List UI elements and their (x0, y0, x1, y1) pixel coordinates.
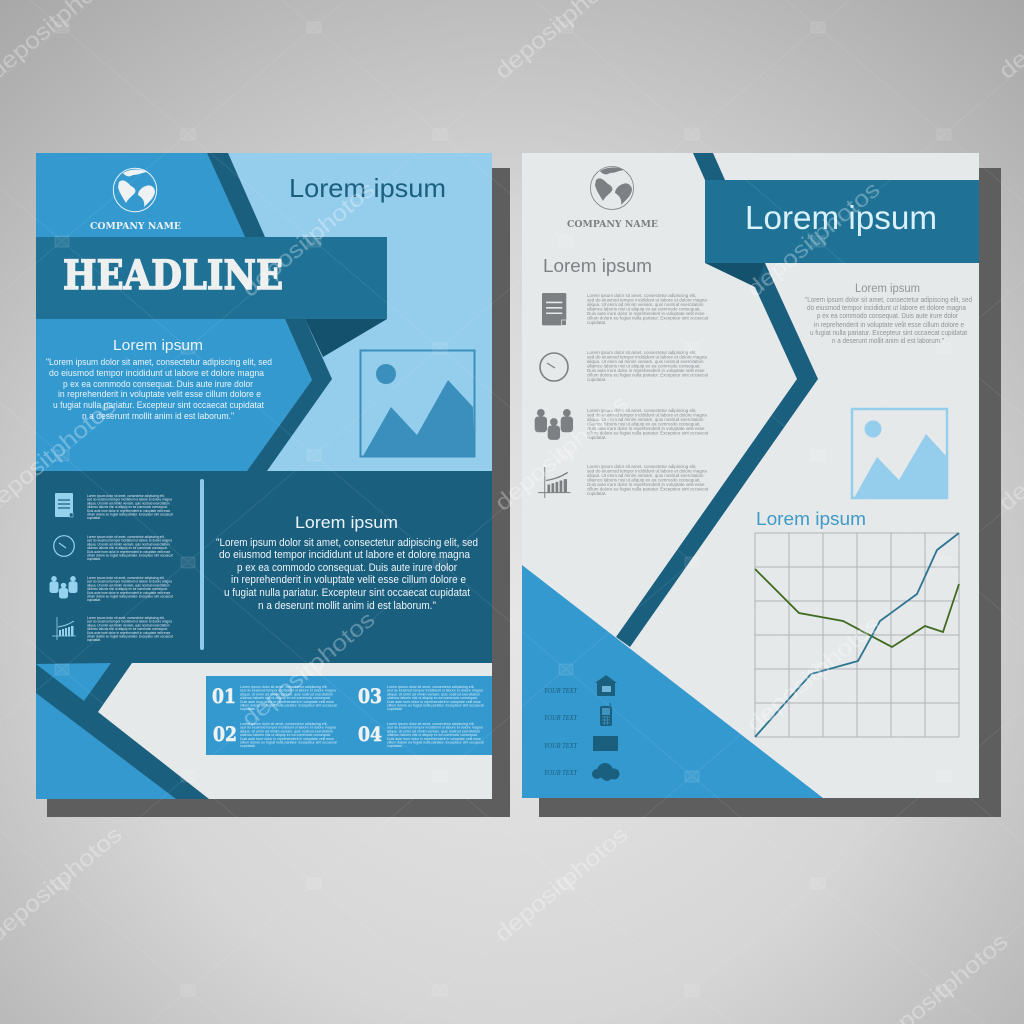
numbered item texts: cupidatat. (240, 707, 256, 711)
text blocks: right list: Duis aute irure dolor in reprehenderit in voluptate velit esse (587, 368, 705, 373)
numbered item texts: sed do eiusmod tempor incididunt ut labore et dolore magna (240, 726, 336, 730)
text block: top right paragraph (805, 283, 972, 345)
numbered item texts: cillum dolore eu fugiat nulla pariatur. Excepteur sint occaecat (240, 740, 337, 744)
watermark texts: depositphotos (490, 390, 633, 516)
icon: clock (540, 353, 568, 381)
text block: top right paragraph: Lorem ipsum (855, 283, 920, 295)
numbered item texts: ullamco laboris nisi ut aliquip ex ea commodo consequat. (387, 733, 478, 737)
text block: top right paragraph: "Lorem ipsum dolor sit amet, consectetur adipiscing elit, sed (805, 295, 972, 304)
text blocks: left list (87, 494, 173, 642)
number 03: 03 (358, 685, 382, 708)
text blocks: right list: cupidatat. (587, 491, 607, 496)
your text labels: YOUR TEXT (544, 769, 578, 777)
text block: dark panel: "Lorem ipsum dolor sit amet, consectetur adipiscing elit, sed (216, 537, 478, 549)
bottom dark stripes (36, 663, 209, 799)
text block: blue panel: u fugiat nulla pariatur. Excepteur sint occaecat cupidatat (53, 400, 264, 411)
lower blue arrow shape (36, 319, 312, 471)
left page shadow (47, 168, 510, 817)
text block: dark panel: u fugiat nulla pariatur. Excepteur sint occaecat cupidatat (224, 587, 470, 599)
numbered item texts: sed do eiusmod tempor incididunt ut labore et dolore magna (387, 689, 483, 693)
text block: blue panel: Lorem ipsum (113, 337, 203, 354)
text blocks: right list: Duis aute irure dolor in reprehenderit in voluptate velit esse (587, 311, 705, 316)
text blocks: right list: ullamco laboris nisi ut aliquip ex ea commodo consequat. (587, 478, 701, 482)
text blocks: left list: cillum dolore eu fugiat nulla pariatur. Excepteur sint occaecat (87, 554, 173, 558)
text blocks: right list: ullamco laboris nisi ut aliquip ex ea commodo consequat. (587, 422, 701, 426)
text blocks: left list: cillum dolore eu fugiat nulla pariatur. Excepteur sint occaecat (87, 594, 173, 598)
text blocks: left list: Lorem ipsum dolor sit amet, consectetur adipiscing elit, (87, 576, 165, 580)
text blocks: left list: cupidatat. (87, 598, 101, 602)
text blocks: left list: Duis aute irure dolor in reprehenderit in voluptate velit esse (87, 631, 171, 635)
numbered item texts: cillum dolore eu fugiat nulla pariatur. Excepteur sint occaecat (387, 740, 484, 744)
text block: blue panel: p ex ea commodo consequat. Duis aute irure dolor (63, 379, 253, 390)
numbered item texts (240, 685, 484, 748)
text blocks: right list: Lorem ipsum dolor sit amet, consectetur adipiscing elit, (587, 408, 697, 413)
number 01: 01 (212, 685, 236, 708)
text blocks: right list: Lorem ipsum dolor sit amet, consectetur adipiscing elit, (587, 293, 697, 298)
text blocks: right list: cillum dolore eu fugiat nulla pariatur. Excepteur sint occaecat (587, 372, 709, 378)
icon: people (535, 409, 573, 440)
text blocks: right list: ullamco laboris nisi ut aliquip ex ea commodo consequat. (587, 364, 701, 368)
text blocks: left list: Lorem ipsum dolor sit amet, consectetur adipiscing elit, (87, 535, 165, 539)
watermark texts: depositphotos (237, 176, 380, 302)
right page shadow (539, 168, 1001, 817)
icon: document (542, 293, 566, 325)
numbered item texts: Lorem ipsum dolor sit amet, consectetur adipiscing elit, (240, 685, 328, 689)
text blocks: left list: aliqua. Ut enim ad minim veniam, quis nostrud exercitation (87, 501, 170, 505)
text blocks: right list: Lorem ipsum dolor sit amet, consectetur adipiscing elit, (587, 350, 697, 355)
text block: top right paragraph: n a deserunt mollit anim id est laborum." (832, 336, 944, 345)
watermark texts: depositphotos (742, 611, 885, 737)
icon: image placeholder (852, 409, 947, 498)
numbered item texts: ullamco laboris nisi ut aliquip ex ea commodo consequat. (387, 696, 478, 700)
banner fold (705, 263, 765, 287)
large blue triangle (36, 693, 176, 799)
text blocks: right list: sed do eiusmod tempor incididunt ut labore et dolore magna (587, 298, 707, 302)
text blocks: left list: cupidatat. (87, 516, 101, 520)
text block: dark panel: in reprehenderit in voluptate velit esse cillum dolore e (231, 574, 466, 586)
bottom light area (36, 663, 492, 799)
text blocks: left list: aliqua. Ut enim ad minim veniam, quis nostrud exercitation (87, 583, 170, 587)
your text labels: YOUR TEXT (544, 742, 578, 750)
text blocks: right list: Duis aute irure dolor in reprehenderit in voluptate velit esse (587, 426, 705, 431)
numbered item texts: Duis aute irure dolor in reprehenderit in voluptate velit esse (387, 737, 481, 741)
text block: top right paragraph: do eiusmod tempor incididunt ut labore et dolore magna (807, 303, 966, 312)
vertical divider (200, 479, 204, 650)
icon: people (50, 576, 78, 598)
text blocks: left list: sed do eiusmod tempor incididunt ut labore et dolore magna (87, 498, 172, 502)
panel: numbered list (206, 676, 492, 755)
heading: Lorem ipsum (543, 255, 652, 276)
dark chevron stripe (247, 319, 332, 471)
text block: dark panel: Lorem ipsum (295, 513, 398, 532)
company name: COMPANY NAME (90, 221, 181, 232)
text blocks: right list: aliqua. Ut enim ad minim veniam, quis nostrud exercitation (587, 417, 704, 422)
numbered item texts: ullamco laboris nisi ut aliquip ex ea commodo consequat. (240, 696, 331, 700)
text blocks: right list: ullamco laboris nisi ut aliquip ex ea commodo consequat. (587, 306, 701, 312)
long chevron stripe (616, 263, 818, 647)
text blocks: right list (587, 293, 709, 496)
icon: clock (54, 536, 74, 556)
icon: image placeholder (360, 350, 474, 457)
text blocks: left list: cupidatat. (87, 557, 101, 561)
text blocks: left list: sed do eiusmod tempor incididunt ut labore et dolore magna (87, 620, 172, 624)
text blocks: left list: Lorem ipsum dolor sit amet, consectetur adipiscing elit, (87, 616, 165, 620)
banner title: Lorem ipsum (745, 199, 937, 236)
numbered item texts: aliqua. Ut enim ad minim veniam, quis nostrud exercitation (387, 692, 480, 696)
line chart (755, 533, 959, 737)
number 02: 02 (213, 723, 237, 746)
text blocks: left list: cillum dolore eu fugiat nulla pariatur. Excepteur sint occaecat (87, 512, 173, 516)
numbered item texts: sed do eiusmod tempor incididunt ut labore et dolore magna (387, 726, 483, 730)
numbered item texts: sed do eiusmod tempor incididunt ut labore et dolore magna (240, 689, 336, 693)
text block: blue panel: in reprehenderit in voluptate velit esse cillum dolore e (58, 389, 261, 400)
top dark stripe (693, 153, 725, 180)
text blocks: right list: sed do eiusmod tempor incididunt ut labore et dolore magna (587, 412, 707, 418)
text blocks: left list: Duis aute irure dolor in reprehenderit in voluptate velit esse (87, 550, 171, 554)
panel: right page (522, 153, 979, 798)
text block: blue panel: "Lorem ipsum dolor sit amet, consectetur adipiscing elit, sed (46, 357, 272, 368)
text blocks: right list: cillum dolore eu fugiat nulla pariatur. Excepteur sint occaecat (587, 316, 709, 320)
blue series (755, 533, 959, 737)
watermark texts: depositphotos (490, 821, 633, 947)
headline: HEADLINE (63, 252, 283, 299)
watermark texts: depositphotos (237, 606, 380, 732)
text blocks: right list: aliqua. Ut enim ad minim veniam, quis nostrud exercitation (587, 302, 704, 307)
text blocks: right list: cillum dolore eu fugiat nulla pariatur. Excepteur sint occaecat (587, 430, 709, 436)
heading: top right: Lorem ipsum (289, 173, 446, 203)
text block: dark panel (216, 513, 478, 612)
icon: house (595, 675, 617, 696)
text blocks: left list: Duis aute irure dolor in reprehenderit in voluptate velit esse (87, 509, 171, 513)
text block: top right paragraph: p ex ea commodo consequat. Duis aute irure dolor (817, 311, 959, 320)
text blocks: right list: aliqua. Ut enim ad minim veniam, quis nostrud exercitation (587, 359, 704, 364)
numbered item texts: Lorem ipsum dolor sit amet, consectetur adipiscing elit, (240, 722, 328, 726)
text blocks: left list: aliqua. Ut enim ad minim veniam, quis nostrud exercitation (87, 623, 170, 627)
numbered item texts: aliqua. Ut enim ad minim veniam, quis nostrud exercitation (240, 692, 333, 696)
text block: dark panel: p ex ea commodo consequat. Duis aute irure dolor (237, 562, 457, 574)
icon: rectangle (593, 736, 618, 751)
text blocks: left list: ullamco laboris nisi ut aliquip ex ea commodo consequat. (87, 505, 168, 509)
numbered item texts: Duis aute irure dolor in reprehenderit in voluptate velit esse (240, 700, 334, 704)
text block: dark panel: do eiusmod tempor incididunt ut labore et dolore magna (219, 549, 471, 561)
panel: left page (36, 153, 492, 799)
text blocks: left list: cillum dolore eu fugiat nulla pariatur. Excepteur sint occaecat (87, 634, 173, 638)
blue corner triangle (522, 565, 823, 798)
text blocks: left list: sed do eiusmod tempor incididunt ut labore et dolore magna (87, 580, 172, 584)
icon: globe (590, 166, 634, 210)
numbered item texts: aliqua. Ut enim ad minim veniam, quis nostrud exercitation (240, 729, 333, 733)
numbered item texts: aliqua. Ut enim ad minim veniam, quis nostrud exercitation (387, 729, 480, 733)
your text labels: YOUR TEXT (544, 714, 578, 722)
text blocks: right list: Lorem ipsum dolor sit amet, consectetur adipiscing elit, (587, 464, 697, 469)
watermark texts: depositphotos (742, 176, 885, 302)
icon: document (55, 493, 73, 517)
top blue shape (36, 153, 245, 237)
text block: top right paragraph: in reprehenderit in voluptate velit esse cillum dolore e (814, 320, 964, 329)
text blocks: left list: ullamco laboris nisi ut aliquip ex ea commodo consequat. (87, 546, 168, 550)
icon: growth chart (52, 617, 76, 640)
text block: blue panel: do eiusmod tempor incididunt ut labore et dolore magna (49, 368, 265, 379)
icon: growth chart (538, 467, 570, 498)
green series (755, 569, 959, 647)
text block: top right paragraph: u fugiat nulla pariatur. Excepteur sint occaecat cupidatat (810, 328, 967, 337)
title banner (705, 180, 979, 263)
headline banner (36, 237, 387, 319)
company name: COMPANY NAME (567, 219, 658, 230)
icon: cloud (592, 763, 620, 781)
icon: globe (113, 168, 157, 212)
numbered item texts: cupidatat. (387, 744, 403, 748)
numbered item texts: Lorem ipsum dolor sit amet, consectetur adipiscing elit, (387, 722, 474, 726)
numbered item texts: cillum dolore eu fugiat nulla pariatur. Excepteur sint occaecat (240, 704, 337, 708)
text blocks: right list: sed do eiusmod tempor incididunt ut labore et dolore magna (587, 354, 707, 360)
text blocks: right list: cupidatat. (587, 377, 607, 382)
dark panel (36, 471, 492, 663)
icon: phone (600, 703, 612, 726)
text blocks: left list: Duis aute irure dolor in reprehenderit in voluptate velit esse (87, 591, 171, 595)
numbered item texts: Duis aute irure dolor in reprehenderit in voluptate velit esse (240, 737, 334, 741)
text block: dark panel: n a deserunt mollit anim id est laborum." (258, 600, 436, 612)
text block: blue panel: n a deserunt mollit anim id est laborum." (82, 411, 234, 422)
text block: blue panel (46, 337, 272, 422)
text blocks: right list: cupidatat. (587, 435, 607, 440)
number 04: 04 (358, 723, 382, 746)
text blocks: left list: cupidatat. (87, 638, 101, 642)
numbered item texts: cupidatat. (387, 707, 403, 711)
chart heading: Lorem ipsum (756, 508, 866, 529)
numbered item texts: cupidatat. (240, 744, 256, 748)
text blocks: left list: aliqua. Ut enim ad minim veniam, quis nostrud exercitation (87, 542, 170, 546)
text blocks: right list: aliqua. Ut enim ad minim veniam, quis nostrud exercitation (587, 473, 704, 478)
text blocks: left list: Lorem ipsum dolor sit amet, consectetur adipiscing elit, (87, 494, 165, 498)
text blocks: right list: Duis aute irure dolor in reprehenderit in voluptate velit esse (587, 482, 705, 487)
your text labels (544, 687, 578, 777)
numbered item texts: Duis aute irure dolor in reprehenderit in voluptate velit esse (387, 700, 481, 704)
top dark stripe (207, 153, 265, 237)
text blocks: left list: ullamco laboris nisi ut aliquip ex ea commodo consequat. (87, 627, 168, 631)
numbered item texts: ullamco laboris nisi ut aliquip ex ea commodo consequat. (240, 733, 331, 737)
text blocks: right list: sed do eiusmod tempor incididunt ut labore et dolore magna (587, 468, 707, 474)
text blocks: left list: sed do eiusmod tempor incididunt ut labore et dolore magna (87, 539, 172, 543)
your text labels: YOUR TEXT (544, 687, 578, 695)
numbered item texts: cillum dolore eu fugiat nulla pariatur. Excepteur sint occaecat (387, 704, 484, 708)
banner fold (305, 319, 387, 357)
small blue triangle (36, 663, 111, 701)
text blocks: left list: ullamco laboris nisi ut aliquip ex ea commodo consequat. (87, 587, 168, 591)
text blocks: right list: cillum dolore eu fugiat nulla pariatur. Excepteur sint occaecat (587, 486, 709, 492)
numbered item texts: Lorem ipsum dolor sit amet, consectetur adipiscing elit, (387, 685, 474, 689)
text blocks: right list: cupidatat. (587, 320, 607, 325)
